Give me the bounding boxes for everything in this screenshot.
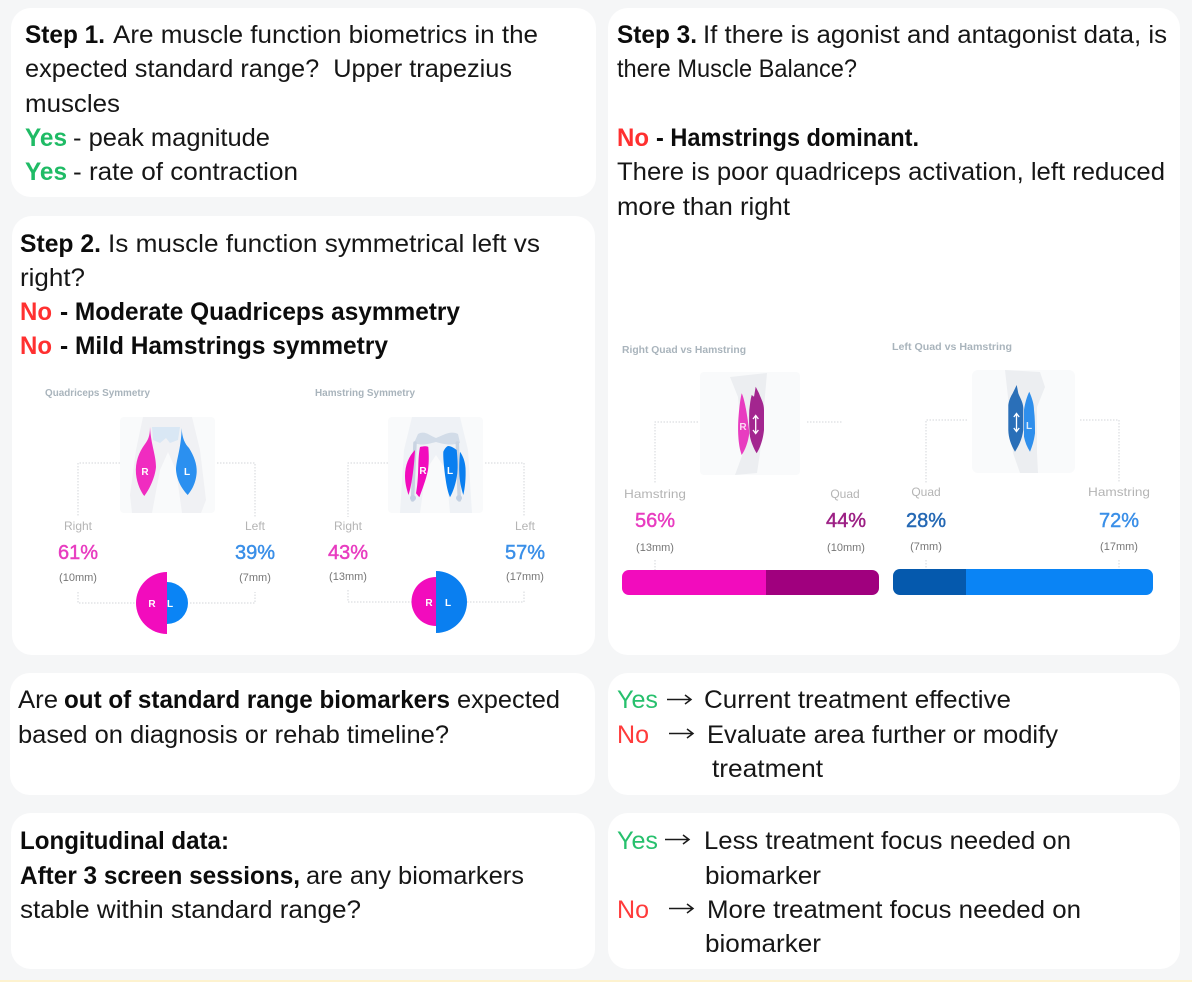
text: no evaluate further: No — [617, 721, 649, 749]
text: yes current treatment effective: Current treatment effective — [704, 686, 1011, 714]
icon: hamstring anatomy: L — [447, 466, 453, 477]
label: left 39%: 39% — [235, 542, 275, 564]
text: step 1 question: muscles — [25, 90, 120, 118]
bar: left quad vs hamstring — [893, 569, 1153, 595]
panel: longitudinal answers — [608, 813, 1180, 969]
text: step 2 question: right? — [20, 264, 85, 292]
text: step 2 answers: - Moderate Quadriceps asymmetry — [60, 298, 460, 326]
label: right 43%: (13mm) — [329, 571, 367, 583]
text: step 2 answers — [20, 298, 460, 360]
label: left 57%: (17mm) — [506, 571, 544, 583]
label: quad 44%: 44% — [826, 510, 866, 532]
text: step 1 answers: - rate of contraction — [73, 158, 298, 186]
text: yes current treatment effective: Yes — [617, 686, 658, 714]
text: step 1 answers — [25, 124, 298, 186]
chart: right quad vs hamstring — [622, 345, 879, 595]
chart: hamstring half circles: R — [425, 598, 433, 609]
label: quad 28% — [906, 485, 946, 553]
text: no evaluate further — [617, 721, 1059, 783]
text: biomarkers question: based on diagnosis or rehab timeline? — [18, 721, 449, 749]
text: yes less treatment focus — [617, 827, 1071, 890]
text: no more treatment focus: No — [617, 896, 649, 924]
panel: biomarkers answers — [608, 673, 1180, 795]
label: quad 28%: Quad — [911, 485, 941, 499]
panel: longitudinal question — [11, 813, 595, 969]
text: step 3 question: Step 3. — [617, 21, 697, 49]
text: longitudinal question: are any biomarkers — [306, 862, 524, 890]
label: right 61%: (10mm) — [59, 572, 97, 584]
label: right 43% — [328, 519, 368, 583]
text: step 1 question: expected standard range? Upper trapezius — [25, 55, 512, 83]
text: biomarkers question: out of standard range biomarkers — [64, 686, 450, 714]
text: longitudinal question: stable within standard range? — [20, 896, 361, 924]
label: right 43%: 43% — [328, 542, 368, 564]
label: hamstring 56%: (13mm) — [636, 542, 674, 554]
text: biomarkers question: Are — [18, 686, 58, 714]
text: step 3 answer — [617, 124, 1165, 221]
chart: hamstring half circles: L — [445, 598, 451, 609]
label: right 43%: Right — [334, 519, 363, 533]
label: hamstring 56%: Hamstring — [624, 487, 686, 501]
icon: quadriceps anatomy: R — [141, 467, 149, 478]
text: no more treatment focus: More treatment focus needed on — [707, 896, 1081, 924]
text: no more treatment focus — [617, 896, 1081, 958]
icon: quadriceps anatomy: L — [184, 467, 190, 478]
icon: right leg anatomy — [700, 372, 800, 475]
text: longitudinal question — [20, 827, 524, 924]
label: left 57%: 57% — [505, 542, 545, 564]
bar: right hamstring vs quad — [622, 570, 879, 595]
icon: hamstring anatomy: R — [419, 466, 427, 477]
text: biomarkers question: expected — [457, 686, 560, 714]
text: step 2 answers: No — [20, 298, 52, 326]
text: step 3 question — [617, 21, 1167, 83]
text: step 2 answers: No — [20, 332, 52, 360]
text: step 1 question: Step 1. — [25, 21, 105, 49]
label: hamstring 72%: 72% — [1099, 510, 1139, 532]
text: yes less treatment focus: Less treatment focus needed on — [704, 827, 1071, 855]
heading: quadriceps symmetry: Quadriceps Symmetry — [45, 388, 150, 399]
label: quad 44%: Quad — [830, 487, 860, 501]
label: hamstring 56% — [624, 487, 686, 554]
label: left 39% — [235, 519, 275, 584]
label: left 39%: Left — [245, 519, 266, 533]
text: no evaluate further: Evaluate area further or modify — [707, 721, 1059, 749]
icon: quadriceps anatomy — [120, 417, 215, 513]
panel: step 1 — [11, 8, 596, 197]
chart: quadriceps half circles: L — [167, 599, 173, 610]
text: yes less treatment focus: biomarker — [705, 862, 821, 890]
panel: step 3 — [608, 8, 1180, 655]
text: step 1 answers: Yes — [25, 124, 67, 152]
icon: hamstring anatomy — [388, 417, 483, 513]
text: step 3 question: If there is agonist and antagonist data, is — [703, 21, 1167, 49]
heading: right quad vs hamstring: Right Quad vs Hamstring — [622, 345, 746, 356]
text: longitudinal question: Longitudinal data: — [20, 827, 229, 855]
text: biomarkers question — [18, 686, 560, 749]
chart: quadriceps symmetry — [45, 388, 275, 634]
panel: biomarkers question — [10, 673, 595, 795]
label: hamstring 72%: Hamstring — [1088, 485, 1150, 499]
chart: hamstring symmetry — [315, 388, 545, 633]
text: step 3 question: there Muscle Balance? — [617, 55, 857, 83]
label: hamstring 72% — [1088, 485, 1150, 553]
heading: hamstring symmetry: Hamstring Symmetry — [315, 388, 415, 399]
text: step 1 answers: - peak magnitude — [73, 124, 270, 152]
text: step 2 answers: - Mild Hamstrings symmetry — [60, 332, 388, 360]
text: longitudinal question: After 3 screen sessions, — [20, 862, 300, 890]
text: step 3 answer: - Hamstrings dominant. — [656, 124, 919, 152]
label: left 39%: (7mm) — [239, 572, 271, 584]
label: left 57%: Left — [515, 519, 536, 533]
text: step 2 question: Is muscle function symmetrical left vs — [108, 230, 540, 258]
label: quad 28%: 28% — [906, 510, 946, 532]
text: step 3 answer: There is poor quadriceps activation, left reduced — [617, 158, 1165, 186]
text: step 2 question — [20, 230, 540, 292]
text: step 1 question — [25, 21, 538, 118]
text: no more treatment focus: biomarker — [705, 930, 821, 958]
heading: left quad vs hamstring: Left Quad vs Hamstring — [892, 342, 1012, 353]
text: step 1 question: Are muscle function biometrics in the — [113, 21, 538, 49]
chart: hamstring half circles — [411, 571, 467, 633]
chart: quadriceps half circles: R — [148, 599, 156, 610]
label: quad 28%: (7mm) — [910, 541, 942, 553]
icon: right leg anatomy: R — [739, 422, 747, 433]
text: yes less treatment focus: Yes — [617, 827, 658, 855]
label: left 57% — [505, 519, 545, 583]
label: hamstring 72%: (17mm) — [1100, 541, 1138, 553]
label: quad 44%: (10mm) — [827, 542, 865, 554]
text: step 1 answers: Yes — [25, 158, 67, 186]
chart: left quad vs hamstring — [892, 342, 1153, 595]
text: step 3 answer: No — [617, 124, 649, 152]
text: step 2 question: Step 2. — [20, 230, 101, 258]
label: hamstring 56%: 56% — [635, 510, 675, 532]
label: right 61%: Right — [64, 519, 93, 533]
chart: quadriceps half circles — [136, 572, 188, 634]
icon: left leg anatomy — [972, 370, 1075, 473]
label: quad 44% — [826, 487, 866, 554]
label: right 61%: 61% — [58, 542, 98, 564]
text: step 3 answer: more than right — [617, 193, 790, 221]
panel: step 2 — [12, 216, 595, 655]
text: no evaluate further: treatment — [712, 755, 823, 783]
label: right 61% — [58, 519, 98, 584]
icon: left leg anatomy: L — [1026, 421, 1032, 432]
